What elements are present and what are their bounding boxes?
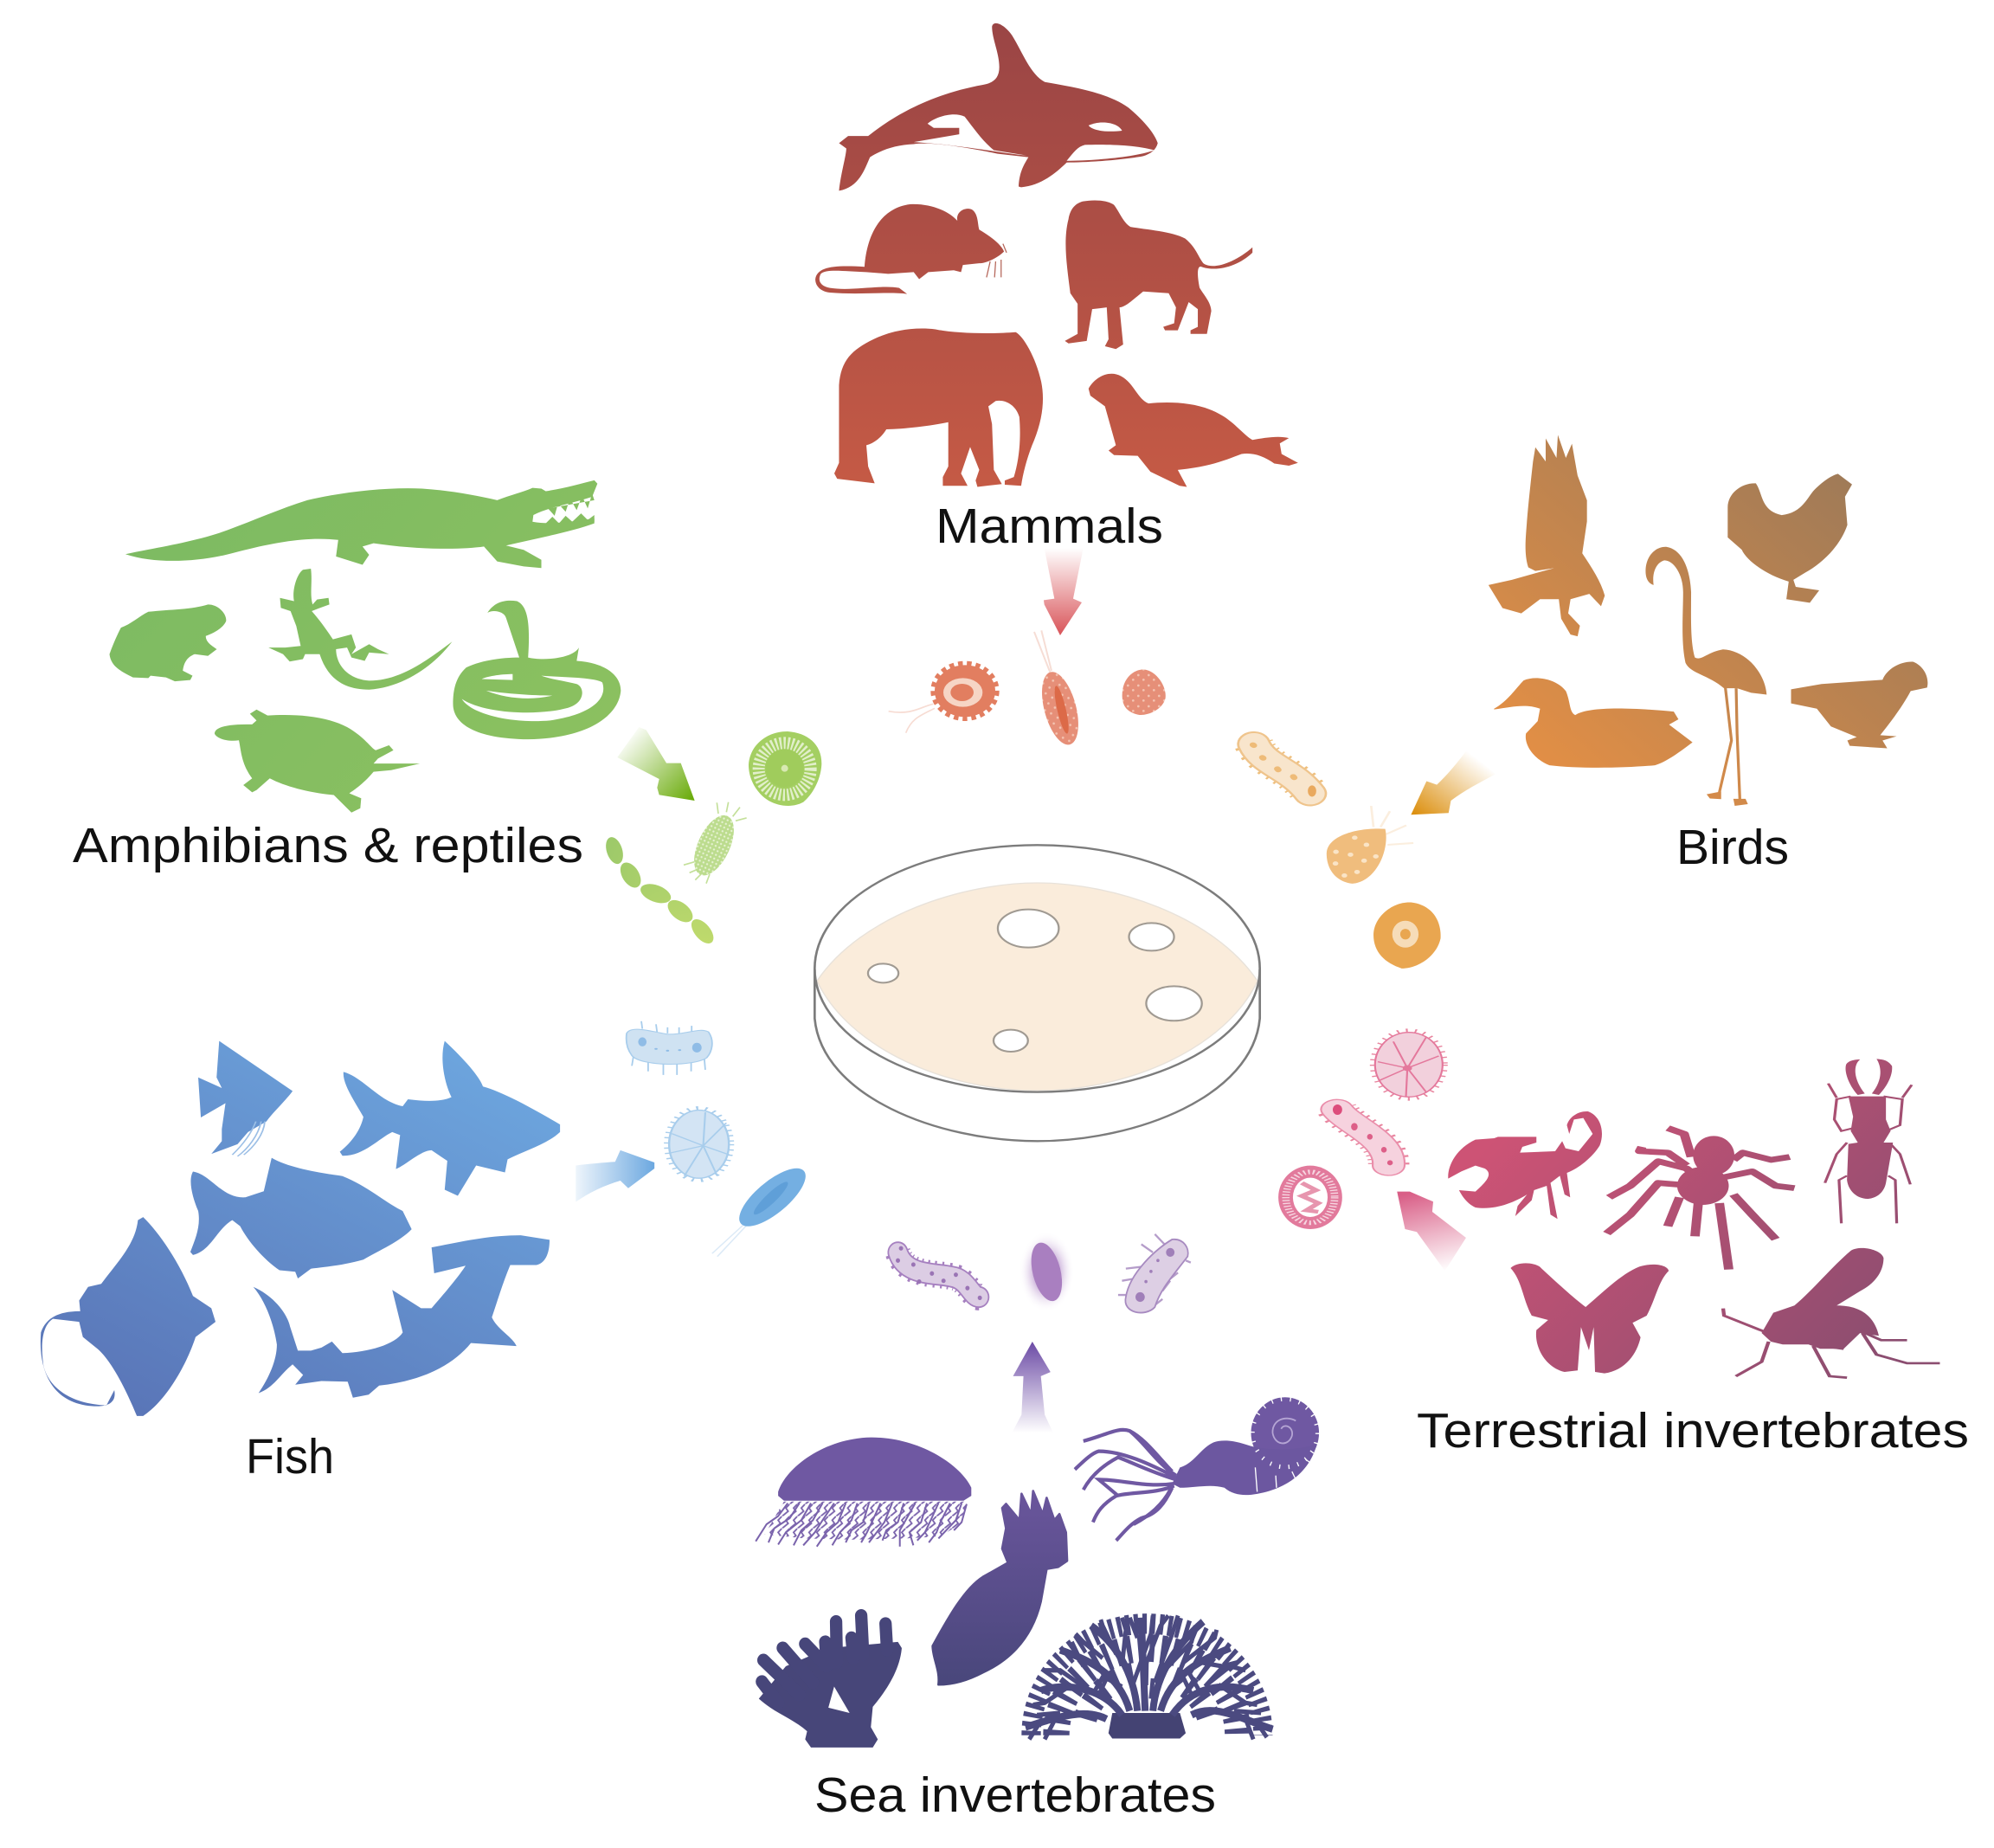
invertebrate silhouettes <box>1278 1031 1939 1378</box>
piranha <box>190 1158 412 1278</box>
lizard <box>268 569 452 690</box>
arrow <box>1044 548 1084 635</box>
mammal arrow and microbes <box>889 548 1166 749</box>
spiky microbe <box>889 664 996 733</box>
round microbe <box>749 731 821 806</box>
rod microbe <box>1253 744 1316 796</box>
heading: Amphibians and reptiles: Amphibians & reptiles <box>73 818 583 873</box>
heading: Mammals: Mammals <box>936 499 1163 554</box>
mouse <box>815 204 1007 294</box>
worm microbe <box>897 1248 980 1297</box>
shark-shaped fish <box>340 1041 560 1196</box>
arrow <box>617 727 695 801</box>
fish silhouettes <box>41 1021 818 1416</box>
chain microbe <box>602 835 717 948</box>
moth <box>1510 1263 1669 1374</box>
snake <box>453 601 621 739</box>
panel: amphibians and reptiles <box>73 480 821 948</box>
dish outline <box>814 845 1260 1141</box>
heading: Fish: Fish <box>246 1429 334 1484</box>
glowing rod microbe <box>1019 1232 1074 1312</box>
agar medium <box>817 883 1258 1091</box>
rod microbe <box>1034 630 1085 749</box>
oval microbe <box>1122 669 1166 715</box>
angelfish <box>198 1041 293 1156</box>
toad <box>110 604 226 681</box>
ring microbe <box>1278 1166 1342 1229</box>
lion <box>1065 200 1252 349</box>
panel: sea invertebrates <box>756 1232 1319 1823</box>
amphibian arrow and microbes <box>602 727 821 948</box>
flagellate microbe <box>712 1163 818 1257</box>
branching coral <box>1026 1615 1272 1739</box>
colonies <box>868 910 1202 1052</box>
bird silhouettes <box>1253 435 1927 969</box>
round microbe <box>1373 902 1441 969</box>
seal <box>1089 374 1298 486</box>
rod microbe <box>1333 1104 1393 1166</box>
stag beetle <box>1825 1059 1912 1223</box>
heading: Sea invertebrates: Sea invertebrates <box>814 1768 1216 1823</box>
amphibian and reptile silhouettes <box>110 480 621 813</box>
elephant <box>834 329 1043 486</box>
sea invertebrate silhouettes <box>756 1232 1319 1748</box>
bean microbe <box>627 1021 712 1075</box>
crocodile <box>125 480 597 568</box>
arrow <box>576 1150 654 1202</box>
panel: fish <box>41 1021 818 1484</box>
duck <box>1494 678 1693 768</box>
arrow <box>1411 750 1496 815</box>
ciliated rod microbe <box>684 802 747 884</box>
scorpion <box>1448 1111 1602 1219</box>
arrow <box>1397 1192 1466 1271</box>
orca <box>839 23 1158 190</box>
heading: Terrestrial invertebrates: Terrestrial invertebrates <box>1417 1403 1969 1458</box>
oval ciliated microbe <box>1327 806 1413 884</box>
chick <box>1791 661 1927 749</box>
fly <box>1723 1248 1939 1378</box>
panel: mammals <box>815 23 1298 749</box>
jellyfish <box>756 1438 971 1547</box>
mammal silhouettes <box>815 23 1298 486</box>
panel: birds <box>1253 435 1927 969</box>
hammerhead shark <box>254 1235 550 1398</box>
arrow <box>1012 1342 1053 1433</box>
eagle <box>1489 435 1605 636</box>
wheel microbe <box>1373 1031 1444 1098</box>
petri dish <box>814 845 1260 1141</box>
stingray <box>41 1217 215 1416</box>
turtle <box>215 710 420 813</box>
flamingo <box>1645 547 1766 806</box>
soft coral <box>759 1615 902 1748</box>
spider <box>1607 1128 1794 1270</box>
panel: terrestrial invertebrates <box>1278 1031 1969 1458</box>
heading: Birds: Birds <box>1676 820 1789 875</box>
hen <box>1727 473 1852 602</box>
wheel microbe <box>667 1108 730 1180</box>
ammonite <box>1075 1397 1319 1541</box>
squid <box>933 1491 1067 1684</box>
bean microbe <box>1118 1234 1191 1313</box>
